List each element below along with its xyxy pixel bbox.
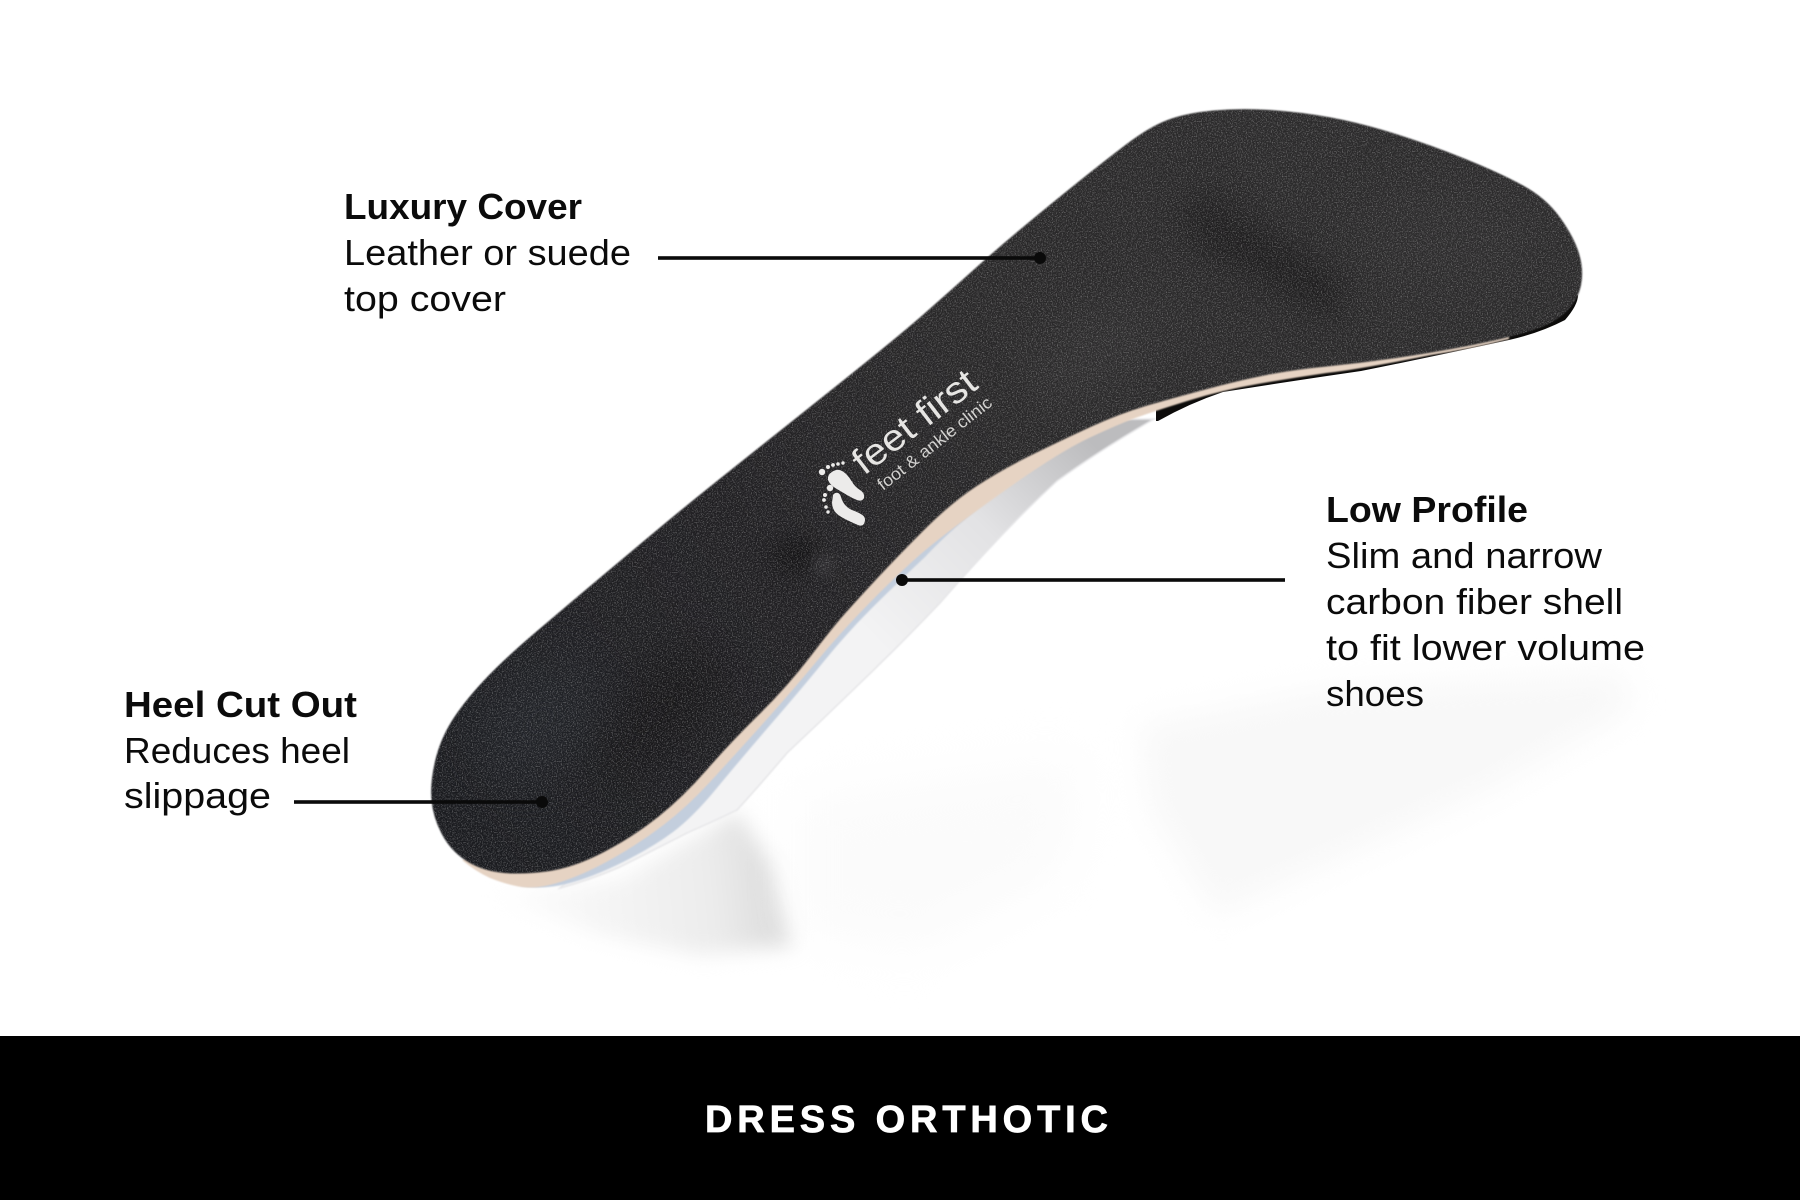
description: top cover [344,278,506,319]
description: Leather or suede [344,232,631,273]
dark forefoot underside [1156,295,1578,421]
description: Reduces heel [124,730,350,771]
insole [425,100,1590,888]
description [344,232,631,319]
floor shadows and reflection [490,672,1630,955]
callout: heel cut out [124,684,548,816]
carbon fiber shell [560,419,1154,888]
description: shoes [1326,673,1424,714]
top cover [431,109,1582,874]
logo wordmark: feet first [844,360,985,482]
description: Slim and narrow [1326,535,1603,576]
pointer [896,574,1285,586]
description [1326,535,1645,714]
callout: luxury cover [344,186,1046,319]
heading: Low Profile [1326,489,1528,530]
blue edge of shell [520,490,1000,888]
description: slippage [124,775,271,816]
heading: Heel Cut Out [124,684,357,725]
tan midlayer [462,334,1509,888]
logo: feet first [819,360,996,526]
icon: footprints [819,461,865,526]
footer title: DRESS ORTHOTIC [705,1099,1108,1141]
cover shading and texture [425,100,1590,880]
footer band [0,1036,1800,1200]
heading: Luxury Cover [344,186,582,227]
callout: low profile [896,489,1645,714]
description [124,730,350,816]
pointer [294,796,548,808]
description: to fit lower volume [1326,627,1645,668]
description: carbon fiber shell [1326,581,1623,622]
logo tagline: foot & ankle clinic [874,393,996,494]
pointer [658,252,1046,264]
